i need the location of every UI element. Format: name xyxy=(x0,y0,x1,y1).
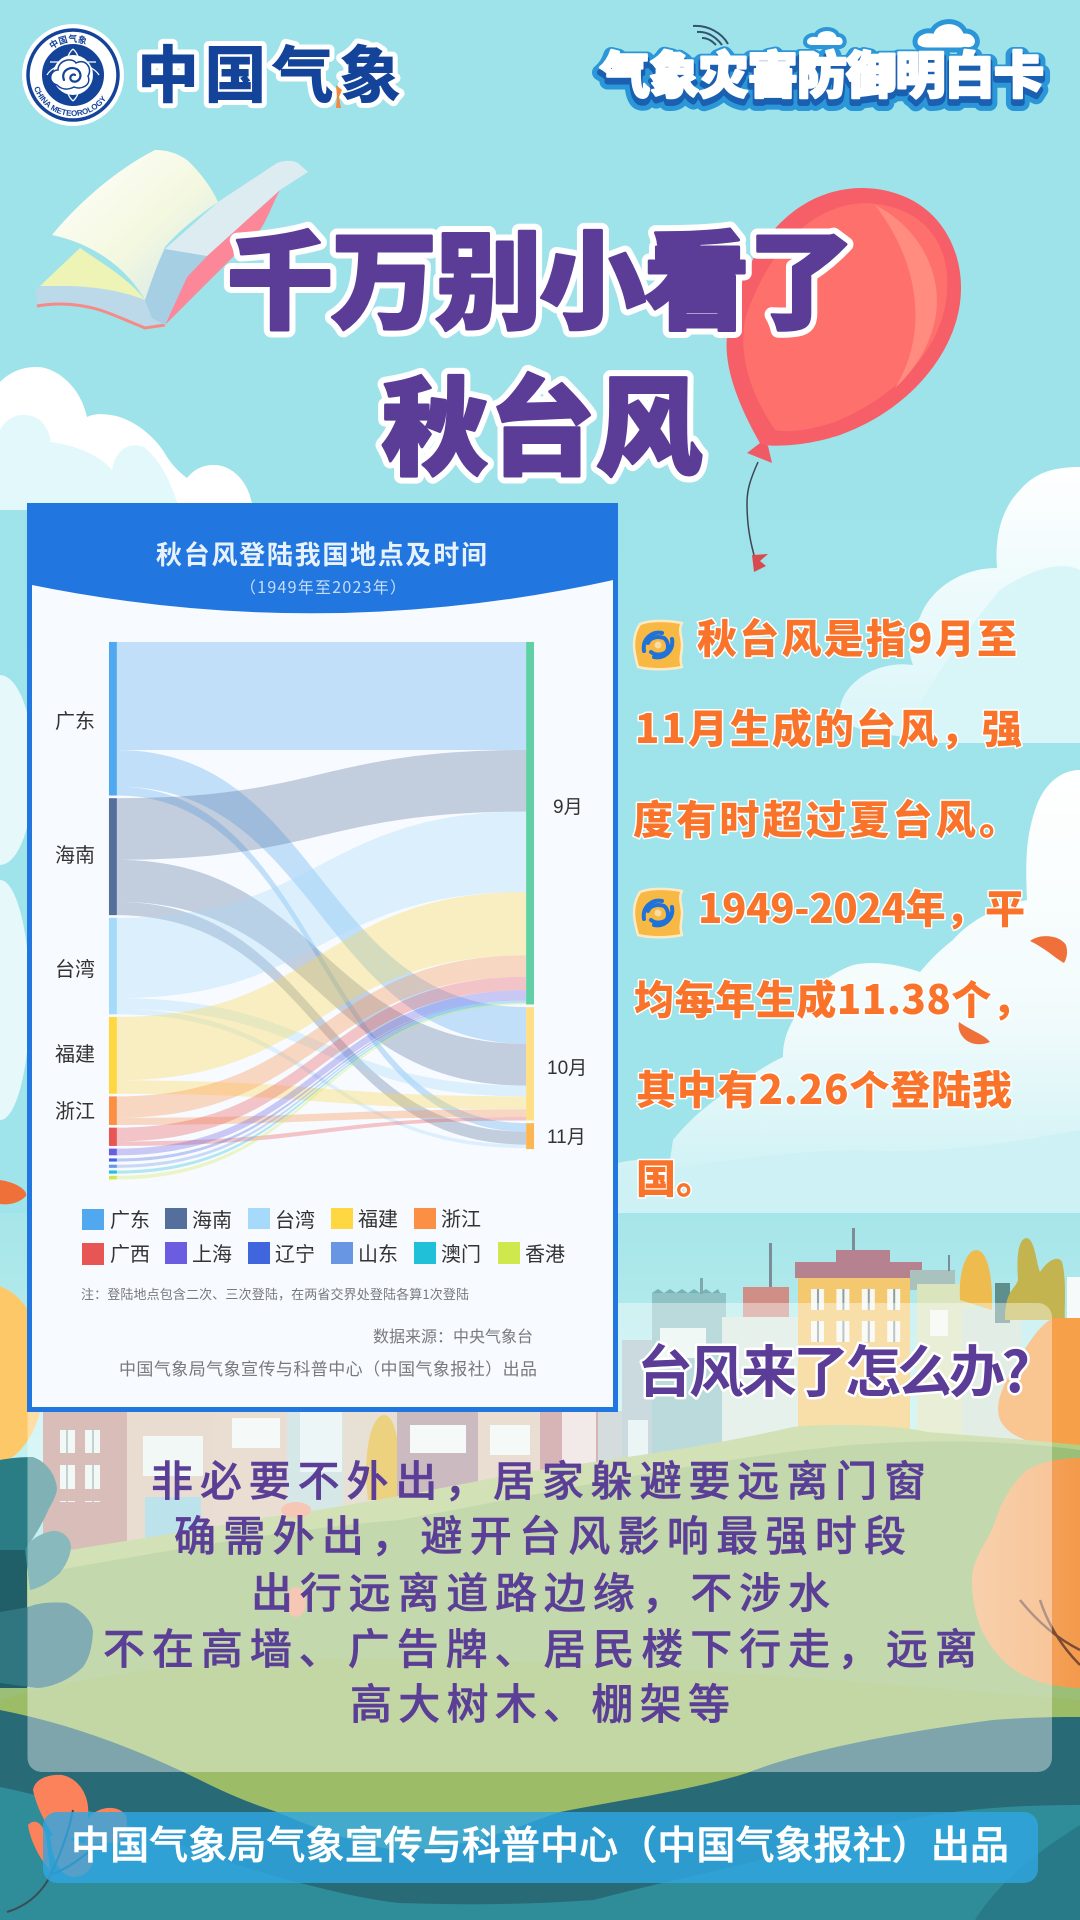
logo: China Meteorology emblem: CHINA METEOROLOGY xyxy=(34,86,106,116)
small peach shrubs xyxy=(281,1502,311,1617)
sankey nodes xyxy=(109,642,534,1179)
legend xyxy=(82,1203,565,1267)
sankey labels: 广东 xyxy=(55,705,95,734)
sankey labels xyxy=(55,705,587,1148)
footer text: 中国气象局气象宣传与科普中心（中国气象报社）出品 xyxy=(71,1815,1009,1871)
legend: 山东 xyxy=(358,1238,398,1267)
icon: red balloon xyxy=(727,188,961,572)
sankey labels: 海南 xyxy=(55,839,95,868)
text block: autumn typhoon facts: 其中有2.26个登陆我 xyxy=(636,1058,1012,1116)
translucent advice panel xyxy=(28,1303,1052,1772)
icon: typhoon bullet 1 xyxy=(634,621,682,669)
chart title: 秋台风登陆我国地点及时间 xyxy=(156,535,487,572)
icon: open book xyxy=(36,150,308,328)
panel: chart card xyxy=(27,503,618,1410)
sky band above city xyxy=(0,1213,1080,1473)
icon: typhoon bullet 2 xyxy=(634,889,682,937)
tree: orange left xyxy=(0,1285,45,1465)
sankey labels: 浙江 xyxy=(55,1095,95,1124)
legend: 福建 xyxy=(358,1203,398,1232)
legend: 海南 xyxy=(192,1204,232,1233)
city skyline: left xyxy=(43,1411,622,1561)
sankey labels: 福建 xyxy=(55,1038,95,1067)
advice text block: 确需外出，避开台风影响最强时段 xyxy=(174,1503,906,1564)
clouds: upper right xyxy=(840,467,1080,743)
title second line: 秋台风 xyxy=(382,371,702,489)
advice text block xyxy=(103,1448,977,1732)
foliage: dark teal left xyxy=(0,1457,93,1688)
badge title: 气象灾害防御明白卡 xyxy=(600,53,1044,109)
icon: orange leaf bottom left xyxy=(7,1775,127,1912)
text block: autumn typhoon facts: 11月生成的台风，强 xyxy=(635,697,1022,755)
badge title: 气象灾害防御明白卡 xyxy=(600,53,1044,109)
text block: autumn typhoon facts xyxy=(633,607,1032,1205)
city skyline: right xyxy=(622,1228,1080,1470)
legend: 广东 xyxy=(110,1204,150,1233)
logo: China Meteorology emblem: 中国气象 xyxy=(49,34,86,48)
badge clouds xyxy=(805,22,977,50)
text block: autumn typhoon facts: 国。 xyxy=(636,1147,716,1205)
sankey labels: 11月 xyxy=(547,1127,586,1148)
sankey flows xyxy=(117,642,526,1179)
hills xyxy=(0,1425,1080,1920)
chart header band xyxy=(27,503,618,613)
sankey labels: 9月 xyxy=(553,797,583,818)
advice text block: 不在高墙、广告牌、居民楼下行走，远离 xyxy=(103,1616,977,1677)
text block: autumn typhoon facts: 1949-2024年，平 xyxy=(698,877,1025,935)
text block: autumn typhoon facts: 均每年生成11.38个， xyxy=(634,968,1032,1026)
main title: 千万别小看了 xyxy=(227,225,854,343)
chart note: 注：登陆地点包含二次、三次登陆，在两省交界处登陆各算1次登陆 xyxy=(81,1284,469,1303)
tree: orange lower right xyxy=(972,1458,1080,1688)
badge signal arcs xyxy=(693,26,728,45)
legend: 澳门 xyxy=(441,1238,481,1267)
advice text block: 非必要不外出，居家躲避要远离门窗 xyxy=(151,1448,926,1509)
advice text block: 高大树木、棚架等 xyxy=(350,1671,730,1732)
chart subtitle: （1949年至2023年） xyxy=(240,574,406,598)
legend: 香港 xyxy=(525,1238,565,1267)
legend: 广西 xyxy=(110,1238,150,1267)
logo wordmark: 中国气象 xyxy=(137,25,401,115)
advice text block: 出行远离道路边缘，不涉水 xyxy=(251,1560,830,1621)
text block: autumn typhoon facts: 秋台风是指9月至 xyxy=(697,607,1017,665)
text block: autumn typhoon facts: 度有时超过夏台风。 xyxy=(633,788,1019,846)
main title xyxy=(227,225,854,489)
title second line: 秋台风 xyxy=(382,371,702,489)
legend: 浙江 xyxy=(441,1203,481,1232)
clouds: left strip behind chart xyxy=(0,675,34,1120)
badge title: 气象灾害防御明白卡 xyxy=(600,48,1044,104)
legend: 辽宁 xyxy=(275,1238,315,1267)
advice heading: 台风来了怎么办? xyxy=(637,1328,1030,1409)
logo: China Meteorology emblem xyxy=(22,24,124,126)
icon: falling leaves xyxy=(0,936,1067,1204)
chart source: 数据来源：中央气象台 xyxy=(373,1323,533,1347)
main title: 千万别小看了 xyxy=(227,225,854,343)
sankey labels: 台湾 xyxy=(55,953,95,982)
sankey labels: 10月 xyxy=(547,1058,587,1079)
sankey chart xyxy=(109,642,534,1179)
tree: orange upper right xyxy=(998,1318,1080,1450)
footer pill xyxy=(43,1812,1038,1883)
legend: 上海 xyxy=(192,1238,232,1267)
badge: disaster defense card xyxy=(600,22,1044,109)
chart producer: 中国气象局气象宣传与科普中心（中国气象报社）出品 xyxy=(119,1355,537,1380)
clouds: upper left xyxy=(0,367,253,510)
clouds: middle and lower right xyxy=(618,770,1080,1213)
legend: 台湾 xyxy=(275,1204,315,1233)
